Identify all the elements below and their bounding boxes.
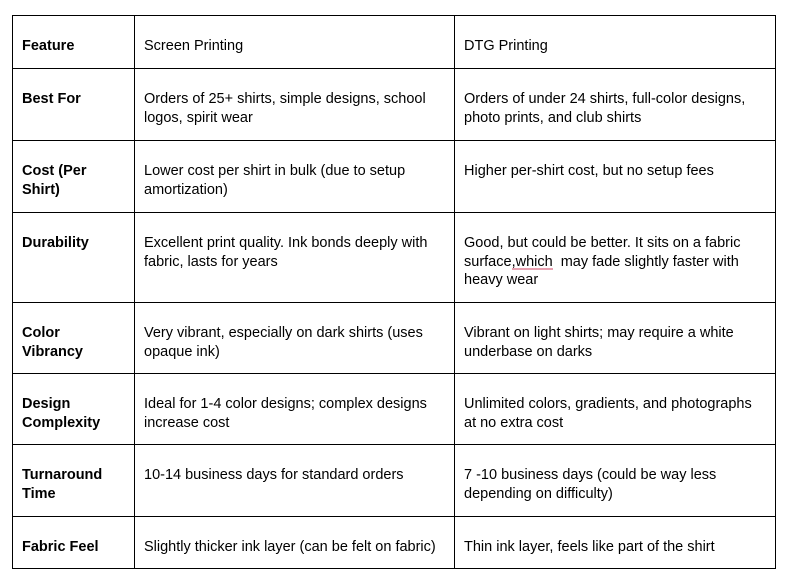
table: screen vs DTG printing comparison: 10-14 business days for standard orders: [144, 467, 404, 483]
table: screen vs DTG printing comparison: Thin ink layer, feels like part of the shirt: [464, 539, 715, 555]
row: design complexity: [12, 374, 776, 444]
table: screen vs DTG printing comparison: Feature: [22, 38, 74, 54]
table: screen vs DTG printing comparison: Best For: [22, 91, 81, 107]
row: best for: [12, 69, 776, 140]
table: screen vs DTG printing comparison: Lower cost per shirt in bulk (due to setup amortization): [144, 163, 405, 198]
table: screen vs DTG printing comparison: Screen Printing: [144, 38, 243, 54]
table: screen vs DTG printing comparison: Slightly thicker ink layer (can be felt on fabric): [144, 539, 436, 555]
table: screen vs DTG printing comparison: Color Vibrancy: [22, 325, 83, 360]
row: color vibrancy: [12, 303, 776, 373]
table: screen vs DTG printing comparison: 7 -10 business days (could be way less depending on difficulty): [464, 467, 716, 502]
table: screen vs DTG printing comparison: Ideal for 1-4 color designs; complex designs increase cost: [144, 396, 427, 430]
table: screen vs DTG printing comparison: Orders of under 24 shirts, full-color designs, photo prints, and club shirts: [464, 91, 745, 126]
table: screen vs DTG printing comparison: Design Complexity: [22, 396, 100, 430]
table: screen vs DTG printing comparison: Good, but could be better. It sits on a fabric surface,which may fade slightly faster with heavy wear: [464, 235, 740, 288]
table: screen vs DTG printing comparison: Turnaround Time: [22, 467, 102, 502]
table: screen vs DTG printing comparison: Cost (Per Shirt): [22, 163, 86, 198]
table: screen vs DTG printing comparison: Higher per-shirt cost, but no setup fees: [464, 163, 714, 179]
row: cost: [12, 141, 776, 212]
table: screen vs DTG printing comparison: Fabric Feel: [22, 539, 99, 555]
table: screen vs DTG printing comparison: Vibrant on light shirts; may require a white underbase on darks: [464, 325, 734, 360]
table: screen vs DTG printing comparison: Durability: [22, 235, 89, 251]
row: turnaround: [12, 445, 776, 516]
table: screen vs DTG printing comparison: Unlimited colors, gradients, and photographs at no extra cost: [464, 396, 752, 430]
row: fabric feel: [12, 517, 776, 569]
table: screen vs DTG printing comparison: DTG Printing: [464, 38, 548, 54]
row: header: [12, 15, 776, 68]
table: screen vs DTG printing comparison: Very vibrant, especially on dark shirts (uses opaque ink): [144, 325, 423, 360]
row: durability: [12, 213, 776, 302]
table: screen vs DTG printing comparison: Excellent print quality. Ink bonds deeply with fabric, lasts for years: [144, 235, 427, 270]
table: screen vs DTG printing comparison: Orders of 25+ shirts, simple designs, school logos, spirit wear: [144, 91, 426, 126]
